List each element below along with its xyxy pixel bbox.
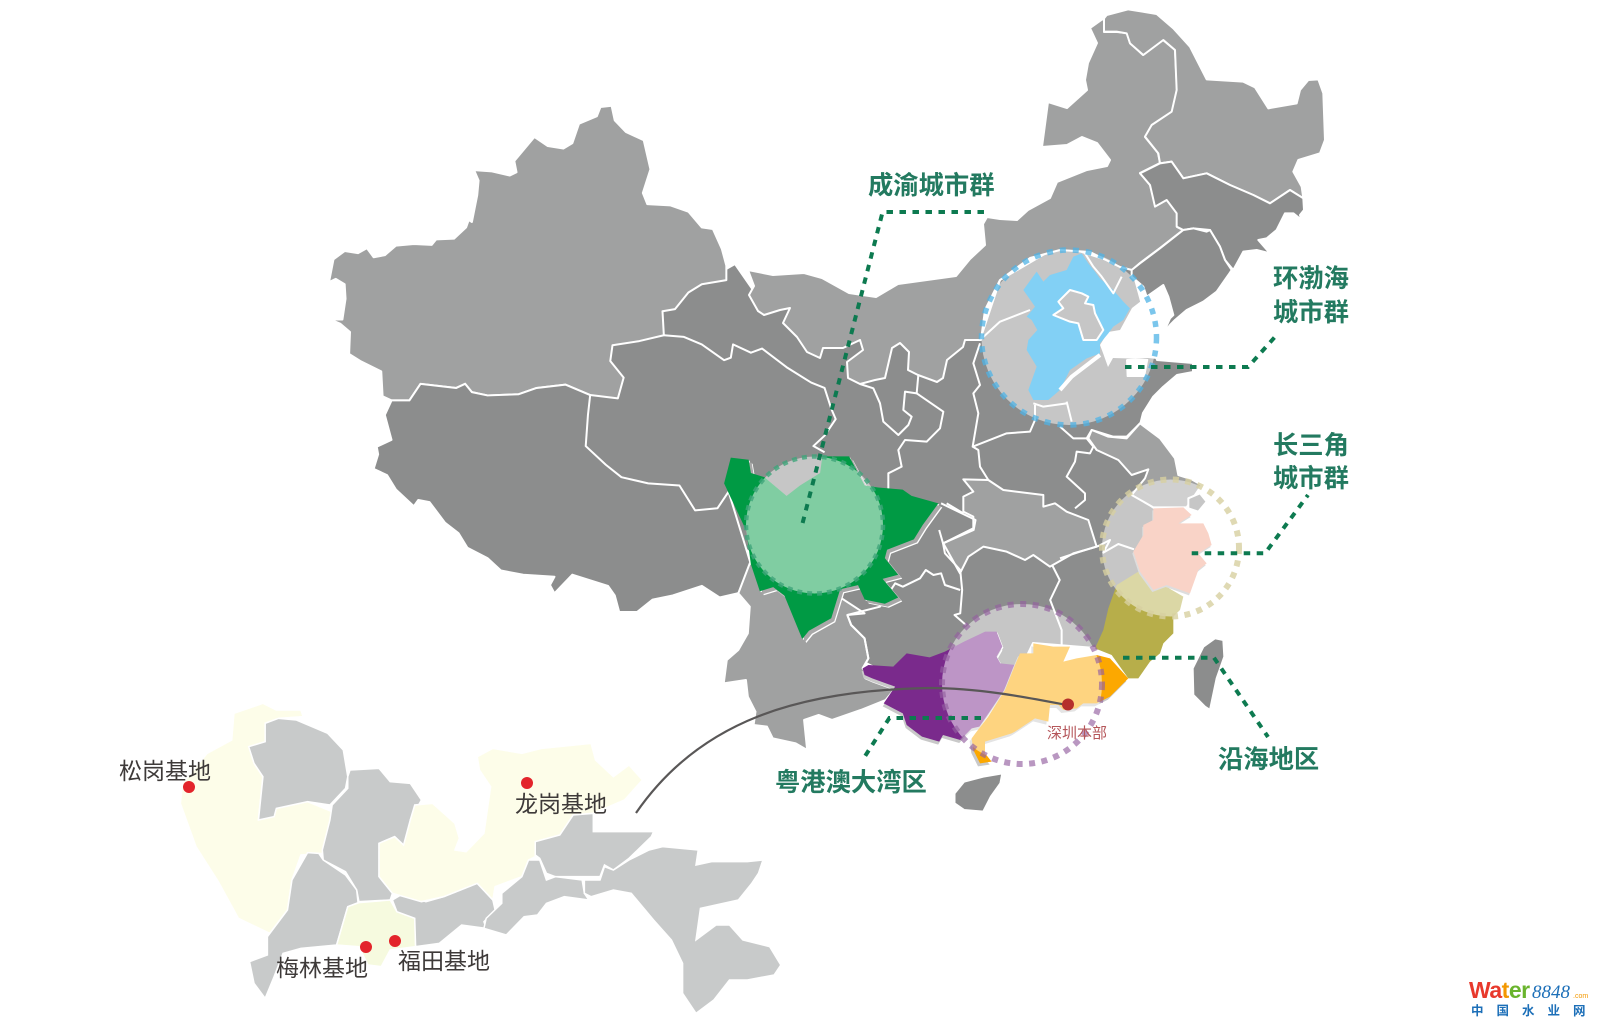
connector curve xyxy=(636,688,1067,813)
baoan xyxy=(180,703,332,933)
label: yangtze delta: 长三角 xyxy=(1273,432,1349,460)
beijing tianjin hole xyxy=(1053,290,1103,340)
southern province lines xyxy=(847,503,1062,668)
label: bohai rim: 城市群 xyxy=(1273,298,1349,327)
longgang xyxy=(379,743,642,902)
zhejiang xyxy=(1133,507,1212,593)
yantian xyxy=(484,860,589,935)
label: yangtze delta: 城市群 xyxy=(1273,464,1349,493)
luohu xyxy=(392,883,495,947)
leader: greater bay xyxy=(863,718,981,760)
pingshan xyxy=(535,813,654,877)
base dot: meilin xyxy=(360,941,372,953)
logo number: 8848 xyxy=(1532,982,1570,1003)
label: bohai rim xyxy=(1273,265,1349,327)
jilin xyxy=(1140,162,1304,270)
watermark logo xyxy=(1469,977,1598,1018)
circle: bohai rim xyxy=(982,250,1156,425)
leader: bohai xyxy=(1125,335,1277,367)
shanghai xyxy=(1188,493,1207,512)
base dot: longgang xyxy=(521,777,533,789)
label: meilin: 梅林基地 xyxy=(276,955,368,981)
base dot: futian xyxy=(389,935,401,947)
taiwan xyxy=(1193,638,1224,710)
logo domain: .com xyxy=(1573,993,1588,1000)
china map xyxy=(329,9,1325,812)
circle: greater bay area xyxy=(942,604,1102,764)
xinjiang xyxy=(329,106,726,400)
shenzhen map xyxy=(119,703,781,1013)
liaoning xyxy=(1132,228,1232,333)
xinjiang tibet qinghai west xyxy=(329,106,836,612)
circle: yangtze delta xyxy=(1102,480,1239,616)
bohai sea xyxy=(1100,285,1200,377)
bohai white patch xyxy=(1126,359,1148,377)
yunnan xyxy=(724,563,895,750)
anhui line xyxy=(1060,540,1134,558)
inner mongolia xyxy=(748,18,1183,384)
sichuan chongqing region xyxy=(724,456,938,639)
circle: chengdu chongqing xyxy=(746,456,883,594)
central borders xyxy=(860,343,1140,573)
logo wordmark: Water xyxy=(1469,977,1530,1003)
label: greater bay area: 粤港澳大湾区 xyxy=(775,768,927,797)
label: longgang: 龙岗基地 xyxy=(515,791,607,817)
hebei tianjin xyxy=(1023,253,1130,400)
label: yangtze delta xyxy=(1273,432,1349,493)
leader: coast xyxy=(1123,658,1268,737)
province lines xyxy=(860,375,918,435)
futian xyxy=(337,900,416,967)
guangming xyxy=(249,718,348,820)
northeast provinces xyxy=(1104,9,1325,333)
leader: yangtze xyxy=(1192,495,1308,553)
label: bohai rim: 环渤海 xyxy=(1273,265,1349,293)
fujian xyxy=(1095,572,1183,678)
guangdong xyxy=(972,643,1128,763)
qinghai gansu border xyxy=(664,335,836,452)
nanshan xyxy=(250,853,358,998)
jiangsu xyxy=(1088,423,1202,507)
base dot: songgang xyxy=(183,781,195,793)
shenzhen headquarters dot xyxy=(1062,698,1074,710)
guangxi xyxy=(863,632,1016,742)
label: songgang: 松岗基地 xyxy=(119,758,211,784)
hainan xyxy=(954,773,1002,812)
label: futian: 福田基地 xyxy=(398,948,490,974)
shenzhen districts xyxy=(180,703,781,1013)
hubei xyxy=(943,479,1097,573)
label: coastal area: 沿海地区 xyxy=(1218,746,1319,774)
bohai rim cities xyxy=(980,253,1148,422)
dapeng xyxy=(584,847,781,1013)
shenzhen headquarters label: 深圳本部 xyxy=(1047,725,1107,742)
heilongjiang xyxy=(1104,9,1325,203)
circle borders xyxy=(980,310,1030,340)
tibet xyxy=(374,384,751,612)
label: chengyu: 成渝城市群 xyxy=(868,171,994,200)
leader: chengyu xyxy=(803,212,988,523)
logo chinese name: 中国水业网 xyxy=(1471,1003,1598,1018)
central provinces base xyxy=(570,245,1193,670)
longhua xyxy=(322,768,421,902)
